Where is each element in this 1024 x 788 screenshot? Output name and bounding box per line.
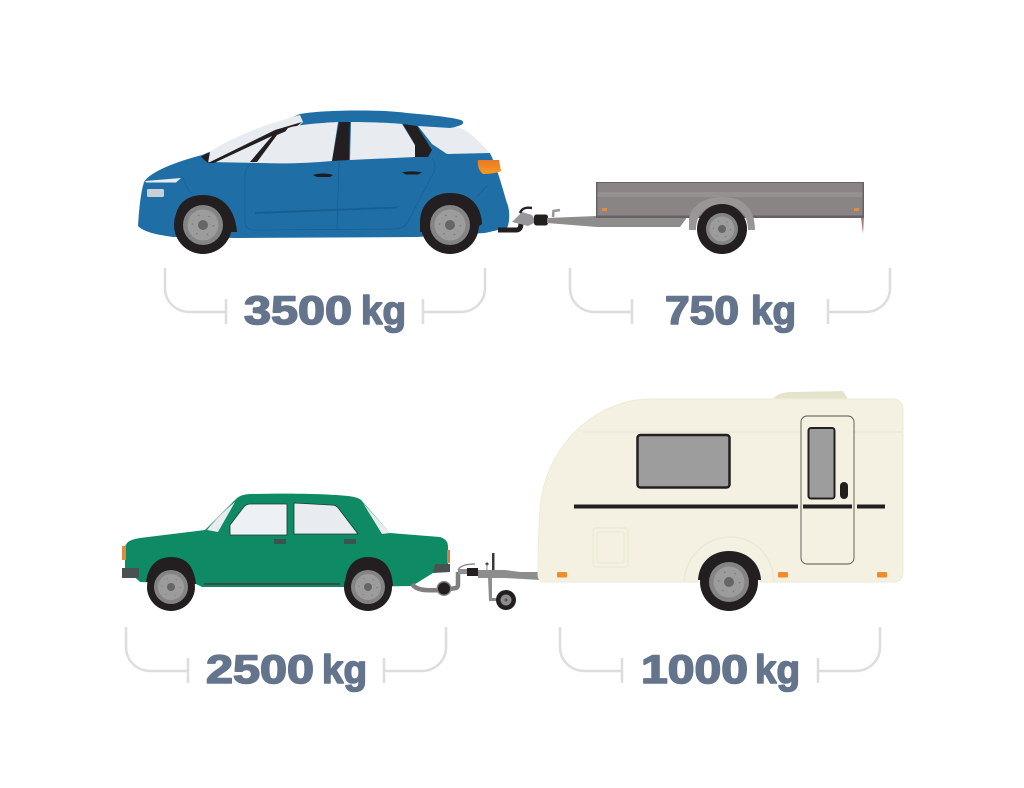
label: 3500 kg: kg (361, 289, 406, 333)
windshield (208, 115, 303, 163)
trailer wheel (697, 204, 747, 254)
lights (122, 546, 126, 560)
roof hatch (773, 391, 848, 399)
label: 750 kg: kg (751, 289, 796, 333)
fender (689, 197, 755, 230)
label: 3500 kg: 3500 (244, 289, 352, 333)
utility trailer (547, 182, 864, 254)
front wheel (174, 196, 232, 254)
wheel (698, 551, 761, 611)
headlights (145, 178, 181, 182)
bumpers (122, 568, 139, 578)
wheel arches (146, 557, 196, 584)
tail light (478, 160, 501, 174)
rear window (294, 503, 358, 534)
door handle (840, 482, 848, 499)
door (801, 416, 854, 564)
caravan body (538, 399, 903, 582)
label: 2500 kg: 2500 (206, 648, 314, 692)
brackets row 2 (126, 627, 880, 683)
rear door window (350, 122, 415, 160)
locker (593, 528, 628, 567)
blue car (138, 110, 509, 254)
door window (808, 428, 834, 498)
brackets row 1 (165, 268, 890, 324)
wheel arches (175, 195, 237, 232)
trailer hitch (498, 208, 560, 230)
front door window (262, 122, 338, 163)
lights (557, 572, 567, 578)
marker lights (602, 208, 607, 211)
trailer box (596, 182, 864, 218)
label: 1000 kg: 1000 (641, 648, 748, 692)
front wheel (147, 563, 195, 611)
windshield (207, 502, 235, 532)
green car (122, 494, 450, 611)
label: 1000 kg: kg (755, 648, 800, 692)
door lines and handles (183, 158, 488, 230)
rear wheel (344, 563, 392, 611)
rear stand (861, 218, 864, 234)
front window (230, 504, 287, 535)
rear glass (363, 503, 390, 534)
stripe (574, 504, 885, 508)
rear pillar (403, 124, 432, 157)
door pillar (332, 122, 350, 161)
door handles (274, 539, 286, 544)
caravan tow hitch and jockey wheel (412, 553, 540, 610)
rear wheel (421, 196, 479, 254)
label: 750 kg: 750 (665, 289, 739, 333)
drawbar (547, 216, 688, 227)
rear quarter glass (418, 126, 490, 154)
label: 2500 kg: kg (322, 648, 367, 692)
caravan (538, 391, 903, 611)
sill (204, 583, 340, 585)
window (638, 435, 730, 488)
